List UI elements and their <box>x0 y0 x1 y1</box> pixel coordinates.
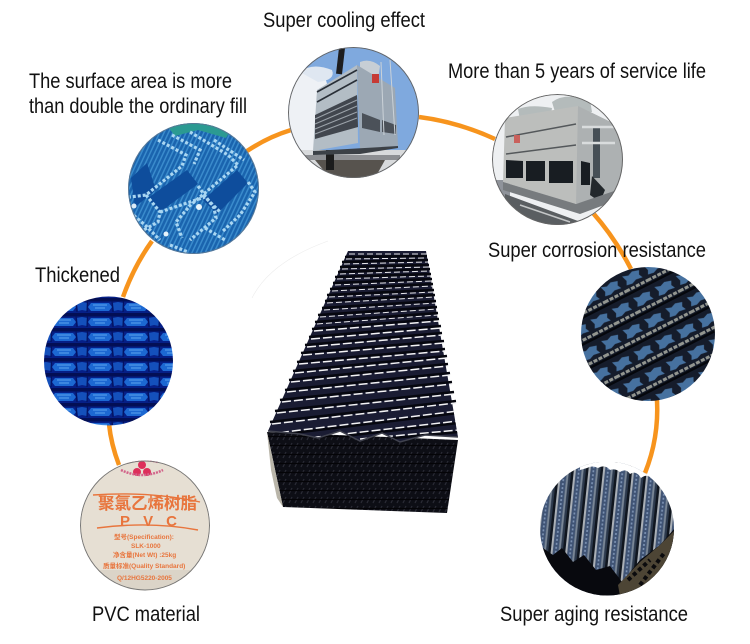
photo: blue fill surface <box>128 123 259 254</box>
photo: PVC material bag <box>80 460 210 591</box>
connecting orange arcs <box>109 117 657 473</box>
photo: black fill aging surface <box>540 462 675 596</box>
label: corrosion resistance: Super corrosion resistance <box>488 239 706 262</box>
faint arc around product <box>252 241 328 298</box>
photo: PVC material bag: 净含量(Net Wt) :25kg <box>113 550 176 559</box>
label: PVC material: PVC material <box>92 603 200 626</box>
label: surface area: The surface area is more <box>29 70 232 93</box>
photo: PVC material bag: 质量标准(Quality Standard) <box>103 561 185 570</box>
label: aging resistance: Super aging resistance <box>500 603 688 626</box>
photo: lifted cooling tower <box>288 47 419 178</box>
photo: PVC material bag: SLK-1000 <box>131 543 161 550</box>
photo: thickened blue fill <box>44 296 174 426</box>
bag text: 聚氯乙烯树脂 <box>98 493 197 513</box>
photo: black fill corrosion surface <box>581 267 715 401</box>
front cross-section <box>267 432 458 513</box>
ridge shadows <box>270 256 456 422</box>
label: surface area second line: than double the ordinary fill <box>29 95 247 118</box>
photo: PVC material bag: Q/12HG5220-2005 <box>117 575 172 582</box>
photo: installed cooling tower <box>492 94 623 225</box>
title: Super cooling effect: Super cooling effect <box>263 9 425 32</box>
photo: PVC material bag: PVC <box>120 513 177 530</box>
lower ridges near front edge <box>268 411 458 441</box>
top surface <box>268 251 458 442</box>
photo: PVC material bag: 型号(Specification): <box>114 532 174 541</box>
label: thickened: Thickened <box>35 264 120 287</box>
emblem <box>133 461 151 476</box>
white ridge highlights <box>317 254 438 324</box>
scalloped front top edge <box>268 431 458 442</box>
product: black cooling tower fill block <box>267 251 458 513</box>
label: service life: More than 5 years of service life <box>448 60 706 83</box>
